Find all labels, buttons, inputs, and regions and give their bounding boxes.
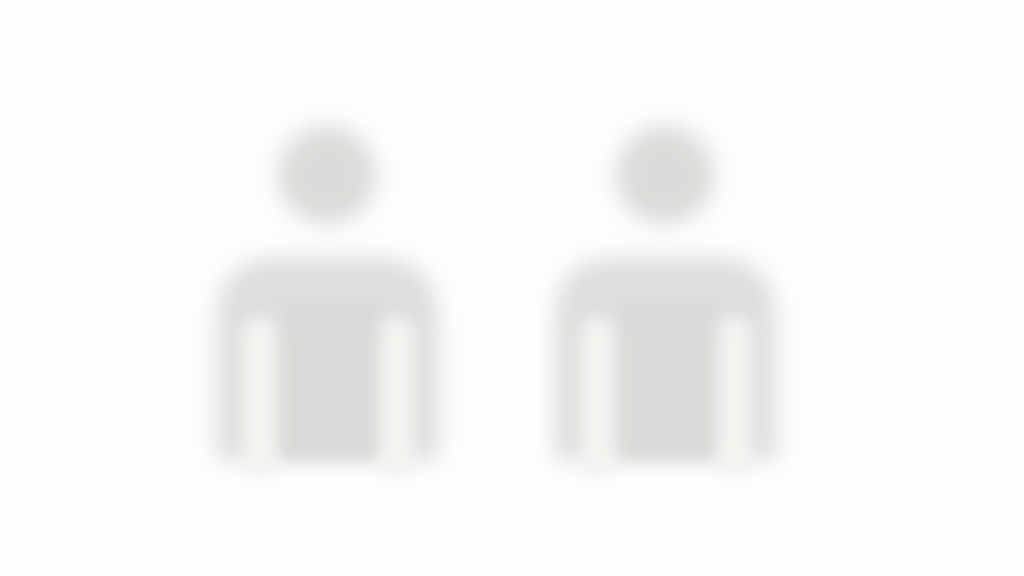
right arm gap <box>381 318 414 478</box>
right arm gap <box>719 318 752 478</box>
left arm gap <box>581 318 614 478</box>
torso <box>618 300 716 458</box>
left arm gap <box>243 318 276 478</box>
icon: left person <box>217 126 438 478</box>
body <box>217 258 438 460</box>
head <box>616 126 714 224</box>
head <box>278 126 376 224</box>
body <box>555 258 776 460</box>
icon: right person <box>555 126 776 478</box>
torso <box>280 300 378 458</box>
